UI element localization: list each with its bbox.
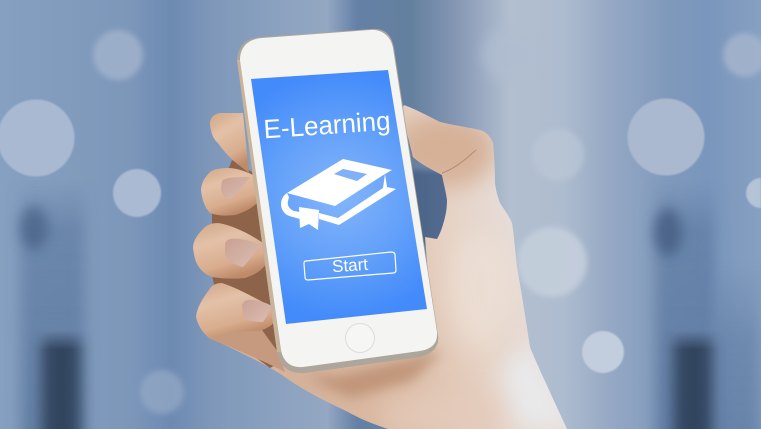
phone body edge xyxy=(237,29,438,373)
home button xyxy=(346,324,374,352)
button: Start: Start xyxy=(331,255,369,276)
thumb crease xyxy=(442,150,476,173)
finger: middle xyxy=(201,168,257,216)
palm below little finger xyxy=(208,330,285,372)
book cover label xyxy=(334,169,367,181)
wrist fade xyxy=(500,340,575,429)
fingernails xyxy=(221,177,272,322)
dark silhouettes xyxy=(20,206,48,250)
book right edge and base xyxy=(319,174,396,225)
hand: palm and thumb xyxy=(210,105,575,429)
button: Start xyxy=(304,252,396,280)
finger: index xyxy=(210,113,249,173)
phone face xyxy=(240,30,437,367)
palm highlight xyxy=(447,251,494,343)
bookmark xyxy=(299,207,319,230)
shadow under phone xyxy=(305,352,442,398)
phone side metal xyxy=(237,60,281,352)
lower palm mid tone xyxy=(384,396,446,429)
gap behind thumb xyxy=(405,170,453,245)
fingers xyxy=(193,113,285,372)
book spine xyxy=(281,193,300,219)
finger: little xyxy=(196,283,275,338)
screen xyxy=(251,70,427,324)
hand shading overlays xyxy=(305,112,575,429)
finger: ring xyxy=(193,223,267,279)
book cover xyxy=(287,159,392,206)
shadow between fingers xyxy=(212,160,285,368)
thumb tone xyxy=(393,112,497,188)
phone xyxy=(237,29,438,373)
icon: book xyxy=(281,159,396,230)
heading: E-Learning: E-Learning xyxy=(263,106,391,144)
